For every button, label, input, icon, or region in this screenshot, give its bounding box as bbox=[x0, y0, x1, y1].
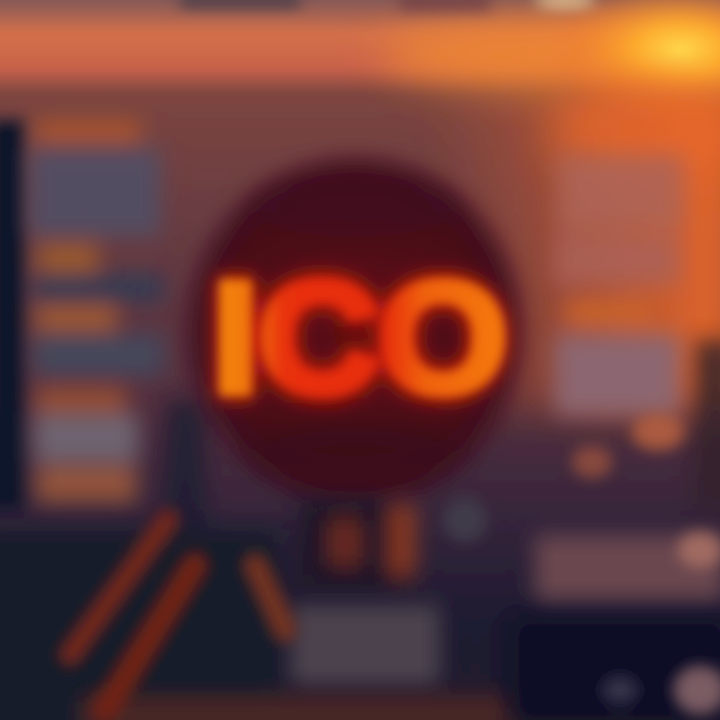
left text block 2 bbox=[34, 274, 164, 302]
right heading bbox=[565, 300, 650, 326]
right text block 3 bbox=[555, 335, 680, 415]
city foreground bbox=[0, 414, 720, 720]
balloon bbox=[190, 160, 520, 500]
red diagonal stripes bbox=[70, 520, 285, 710]
left heading 2 bbox=[38, 244, 98, 272]
left text block 3 bbox=[34, 334, 164, 376]
balloon shade bbox=[250, 180, 460, 240]
right text block 1 bbox=[558, 155, 683, 230]
left heading 3 bbox=[36, 306, 116, 330]
dark ground left bbox=[0, 530, 280, 720]
dark ground right bbox=[510, 615, 720, 720]
central block bbox=[290, 605, 440, 685]
left heading 1 bbox=[36, 120, 140, 142]
left heading 5 bbox=[36, 466, 136, 502]
warm ground bottom bbox=[80, 695, 520, 720]
ICO label: ICO bbox=[212, 250, 508, 426]
dark gap beside left column bbox=[165, 400, 205, 570]
right tower edge bbox=[695, 340, 720, 510]
balloon lower shade bbox=[250, 420, 460, 480]
ICO label glow: ICO bbox=[212, 250, 508, 426]
panel: left dark tower edge bbox=[0, 120, 24, 510]
right text block 2 bbox=[555, 235, 680, 285]
left text block 1 bbox=[30, 148, 160, 236]
city lights bbox=[535, 535, 720, 600]
panel: right text column bbox=[555, 155, 683, 415]
balloon envelope bbox=[190, 160, 520, 500]
left heading 4 bbox=[36, 388, 126, 412]
light dots bbox=[443, 414, 720, 714]
balloon basket bbox=[300, 500, 416, 590]
panel: left text column bbox=[30, 120, 164, 502]
left text block 4 bbox=[34, 414, 138, 462]
